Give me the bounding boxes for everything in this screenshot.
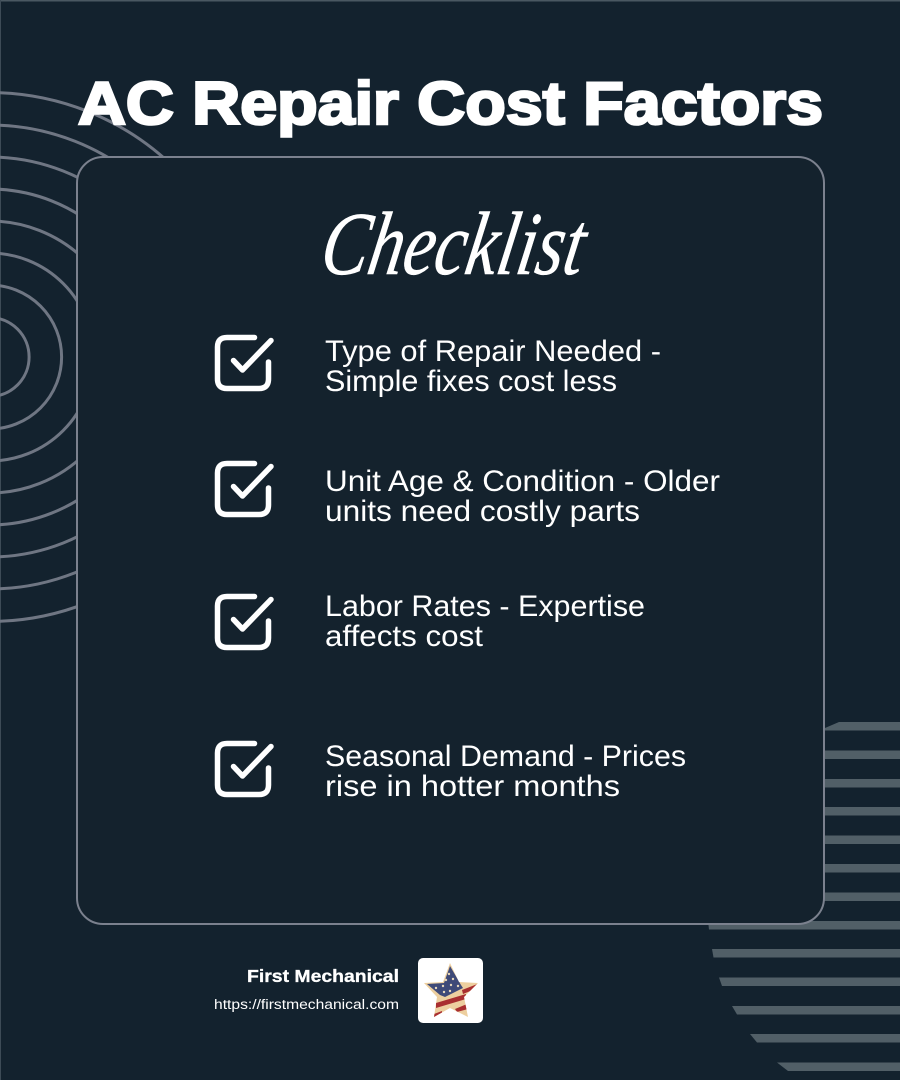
heading: Checklist: Checklist [315, 194, 596, 294]
text: type of repair: Type of Repair Needed - [325, 335, 661, 368]
icon: checkbox [218, 338, 271, 388]
text: type of repair: Simple fixes cost less [325, 365, 617, 398]
text: labor rates: affects cost [325, 620, 484, 653]
brand name: First Mechanical [247, 966, 399, 986]
title: AC Repair Cost Factors [78, 70, 823, 137]
text: seasonal demand: Seasonal Demand - Prices [325, 740, 686, 773]
text: seasonal demand [325, 740, 686, 803]
logo: flag star [418, 958, 483, 1023]
text: unit age: Unit Age & Condition - Older [325, 465, 720, 498]
text: unit age [325, 465, 720, 528]
text: type of repair [325, 335, 661, 398]
checklist item 3 [218, 590, 645, 653]
icon: checkbox [218, 744, 271, 794]
text: seasonal demand: rise in hotter months [325, 770, 620, 803]
text: labor rates [325, 590, 645, 653]
checklist item 2 [218, 464, 720, 528]
footer: brand [214, 958, 483, 1023]
icon: checkbox [218, 464, 271, 514]
panel: checklist [77, 157, 824, 924]
text: unit age: units need costly parts [325, 495, 640, 528]
icon: checkbox [218, 596, 271, 648]
checklist item 1 [218, 335, 661, 398]
panel background [77, 157, 824, 924]
text: labor rates: Labor Rates - Expertise [325, 590, 645, 623]
decoration: horizontal stripes [708, 722, 900, 1071]
checklist item 4 [218, 740, 686, 803]
brand url: https://firstmechanical.com [214, 997, 399, 1012]
decoration: concentric circles [0, 92, 254, 622]
